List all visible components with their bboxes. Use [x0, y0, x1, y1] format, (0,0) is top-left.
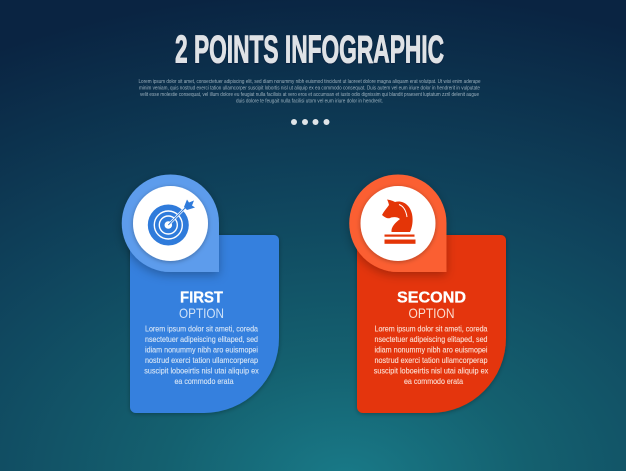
card: blue — [130, 235, 279, 413]
subtitle text block: minim veniam, quis nostrud exerci tation ullamcorper suscipit lobortis nisl ut aliquip ex ea commodo consequat. Duis autem vel eum iriure dolor in hendrerit in vulputate — [139, 86, 480, 92]
icon circle — [133, 186, 208, 261]
panel: second option — [349, 174, 506, 413]
icon: chess knight — [382, 200, 416, 244]
body text: Lorem ipsum dolor sit ameti, coreda — [145, 324, 258, 334]
body text — [374, 324, 488, 386]
body text: Lorem ipsum dolor sit ameti, coreda — [374, 324, 488, 334]
body text: idiam nonummy nibh aro euismopei — [145, 346, 258, 354]
body text: suscipit loboeirtis nisl utai aliquip ex — [144, 366, 259, 376]
body text: nostrud exerci tation ullamcorperap — [145, 356, 258, 365]
subtitle text block: duis dolore te feugait nulla facilisi utom vel eum iriure dolor in hendrerit. — [236, 98, 383, 104]
body text — [144, 324, 259, 386]
icon circle — [360, 186, 436, 261]
card: red — [357, 235, 506, 413]
heading: first: FIRST — [180, 290, 224, 306]
heading: second: SECOND — [397, 290, 466, 306]
subtitle text block: Lorem ipsum dolor sit amet, consectetuer adipiscing elit, sed diam nonummy nibh euismod tincidunt ut laoreet dolore magna aliquam erat volutpat. Ut wisi enim aderape — [138, 79, 481, 85]
title: 2 POINTS INFOGRAPHIC — [175, 28, 444, 72]
dots divider — [291, 119, 330, 125]
subheading: option: OPTION — [408, 305, 454, 321]
body text: nsectetuer adipeiscing elitaped, sed — [374, 335, 488, 344]
body text: nostrud exerci tation ullamcorperap — [374, 356, 488, 365]
badge: blue teardrop — [122, 174, 219, 272]
body text: ea commodo erata — [404, 377, 463, 386]
panel: first option — [122, 174, 279, 413]
body text: ea commodo erata — [174, 377, 234, 386]
subheading: option: OPTION — [179, 305, 224, 321]
body text: suscipit loboeirtis nisl utai aliquip ex — [374, 366, 488, 376]
badge: orange teardrop — [349, 174, 446, 272]
subtitle text block — [138, 79, 481, 104]
body text: idiam nonummy nibh aro euismopei — [374, 346, 488, 354]
body text: nsectetuer adipeiscing elitaped, sed — [145, 335, 258, 344]
subtitle text block: velit esse molestie consequat, vel illum dolore eu feugiat nulla facilisis at vero eros et accumsan et iusto odio dignissim qui blandit praesent luptatum zzril delenit augue — [140, 92, 479, 98]
icon: target with arrow — [148, 200, 195, 246]
